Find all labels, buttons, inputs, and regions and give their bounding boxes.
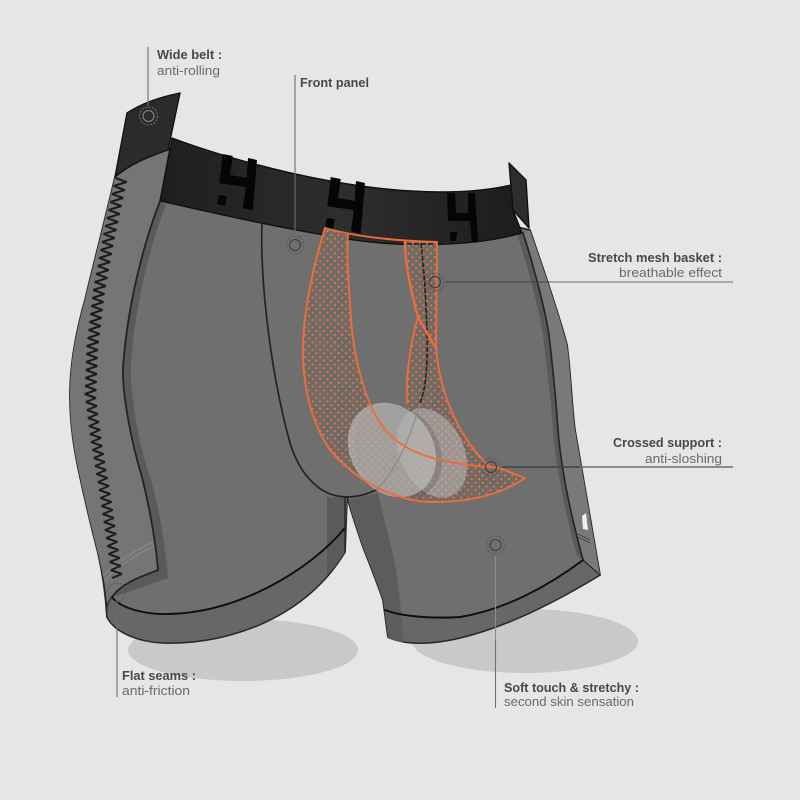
left hem [107,528,345,643]
waistband [160,138,522,245]
left side panel [70,148,168,600]
mesh: right strip [405,242,490,467]
marker and leader [426,273,733,291]
faint seam through forms [378,403,420,488]
left seam band [112,201,168,597]
callout: front panel [286,75,369,254]
sublabel: second skin sensation: second skin sensation [504,695,634,709]
marker and leader [108,583,126,697]
label: flat seams: Flat seams : [122,669,196,683]
right side panel [523,230,600,575]
callout: soft touch [486,536,639,709]
shadow: right leg [412,609,638,673]
back form [383,397,481,509]
marker and leader [486,536,504,708]
callout: stretch mesh basket [426,251,733,291]
label: crossed support: Crossed support : [613,436,722,450]
label: wide belt: Wide belt : [157,48,222,62]
right hem [385,560,600,643]
front form [330,386,454,514]
label: stretch mesh basket: Stretch mesh basket : [588,251,722,265]
label: soft touch and stretchy: Soft touch & stretchy : [504,681,639,695]
logo: centre [325,177,365,234]
callout: wide belt [140,47,222,125]
zigzag seam [85,178,126,578]
black centre seam [420,243,427,403]
boxer garment [70,93,600,643]
flat seam stitching [103,542,154,580]
side logo tag [582,513,588,530]
shadow: left leg [128,619,358,681]
mesh basket [303,228,525,516]
logo: right [447,193,478,242]
logo: left [217,154,257,211]
label: front panel: Front panel [300,76,369,90]
callout: flat seams [108,583,196,698]
marker and leader [286,75,304,254]
marker and leader [482,458,733,476]
sublabel: breathable effect: breathable effect [619,266,723,280]
right side stitching [578,534,590,543]
sublabel: anti-rolling: anti-rolling [157,64,220,78]
right side seam band [517,233,583,560]
front form shadow [336,388,460,516]
marker and leader [140,47,158,125]
seam lines [112,201,583,618]
right leg inner band [348,493,403,642]
callout: crossed support [482,436,733,476]
mesh outlines [303,228,525,502]
top dashed stitch [407,243,435,245]
sublabel: anti-sloshing: anti-sloshing [645,452,722,466]
left belt flap [115,93,180,177]
right belt flap [509,163,529,228]
left leg inner band [327,497,347,575]
mesh: left strip and crossed support [303,228,525,502]
garment body [70,148,600,643]
sublabel: anti-friction: anti-friction [122,684,190,698]
